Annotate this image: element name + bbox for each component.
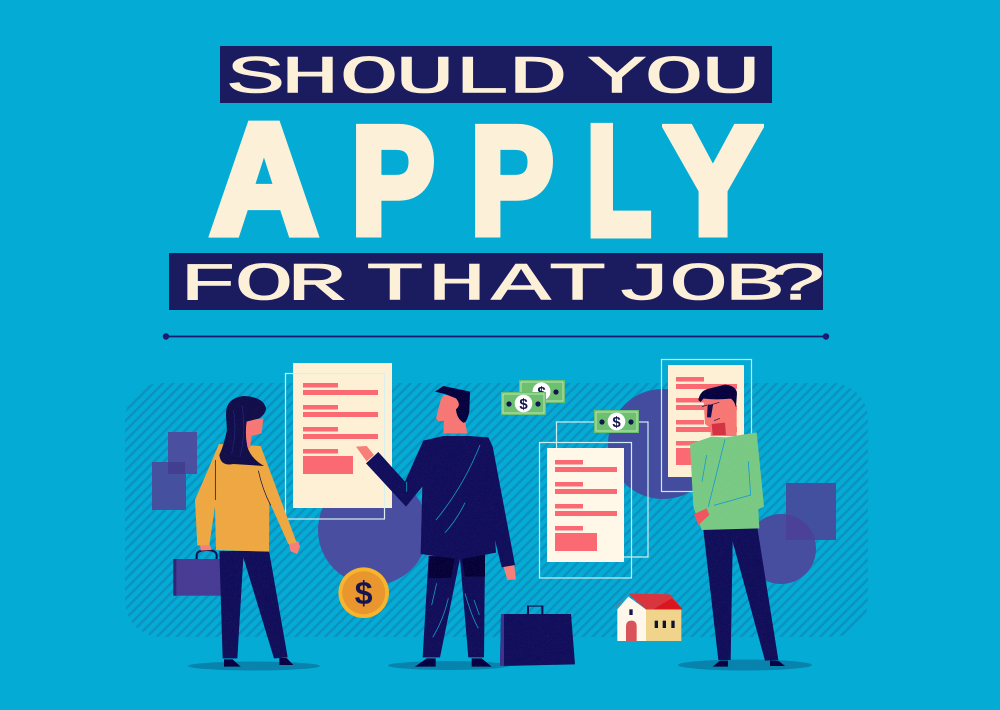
banner: for that job: FOR THAT JOB? [179, 255, 829, 316]
icon: money bill right: $ [612, 414, 621, 431]
striped background panel [125, 383, 868, 637]
person: woman with briefcase [173, 396, 300, 667]
title word: apply: P [470, 96, 553, 266]
title word: apply: P [351, 96, 435, 266]
thinker hair [698, 385, 737, 407]
thinker facial features [702, 402, 720, 421]
document: centre resume [540, 422, 648, 578]
thinker sweater [690, 432, 764, 530]
title word: apply: A [210, 92, 317, 267]
title word: apply [208, 92, 764, 267]
shape: centre blob [318, 475, 428, 585]
man hands [356, 446, 516, 580]
thinker trousers [703, 528, 778, 661]
man hair [435, 386, 470, 423]
shape: right blob [608, 389, 718, 499]
banner: should you: SHOULD YOU [226, 48, 761, 110]
thinker head [703, 397, 737, 436]
document: right resume [662, 360, 752, 492]
man trousers [423, 554, 485, 657]
title word: apply: L [587, 96, 651, 266]
woman face and neck [246, 418, 263, 448]
divider line [163, 333, 829, 340]
icon: money bill back [519, 380, 565, 403]
ground shadows [188, 660, 812, 670]
icon: money bill back: $ [537, 384, 546, 401]
woman sweater [195, 444, 297, 552]
icon: money bill front: $ [519, 396, 528, 413]
shapes: right square and circle [746, 483, 836, 584]
woman hair [219, 396, 266, 466]
thinker hand [694, 508, 709, 525]
person: man thinking [690, 385, 785, 667]
woman shoes [224, 658, 293, 667]
icon: coin: $ [355, 575, 373, 611]
woman hands [200, 541, 300, 554]
shapes: left squares [152, 432, 197, 510]
icon: briefcase [500, 606, 575, 666]
person: man pointing [356, 386, 516, 667]
icon: money bill front [501, 392, 546, 415]
document: left resume [286, 363, 392, 519]
icon: money bill right [594, 410, 639, 433]
icon: coin [338, 567, 389, 618]
title word: apply: Y [665, 96, 760, 266]
thinker shoes [713, 661, 785, 667]
man sweater [366, 436, 515, 567]
briefcase: left [173, 550, 221, 596]
thinker beard [712, 423, 726, 435]
woman trousers [219, 551, 288, 658]
man neck and head [436, 395, 467, 433]
icon: house [614, 594, 683, 641]
man shoes [415, 658, 492, 667]
